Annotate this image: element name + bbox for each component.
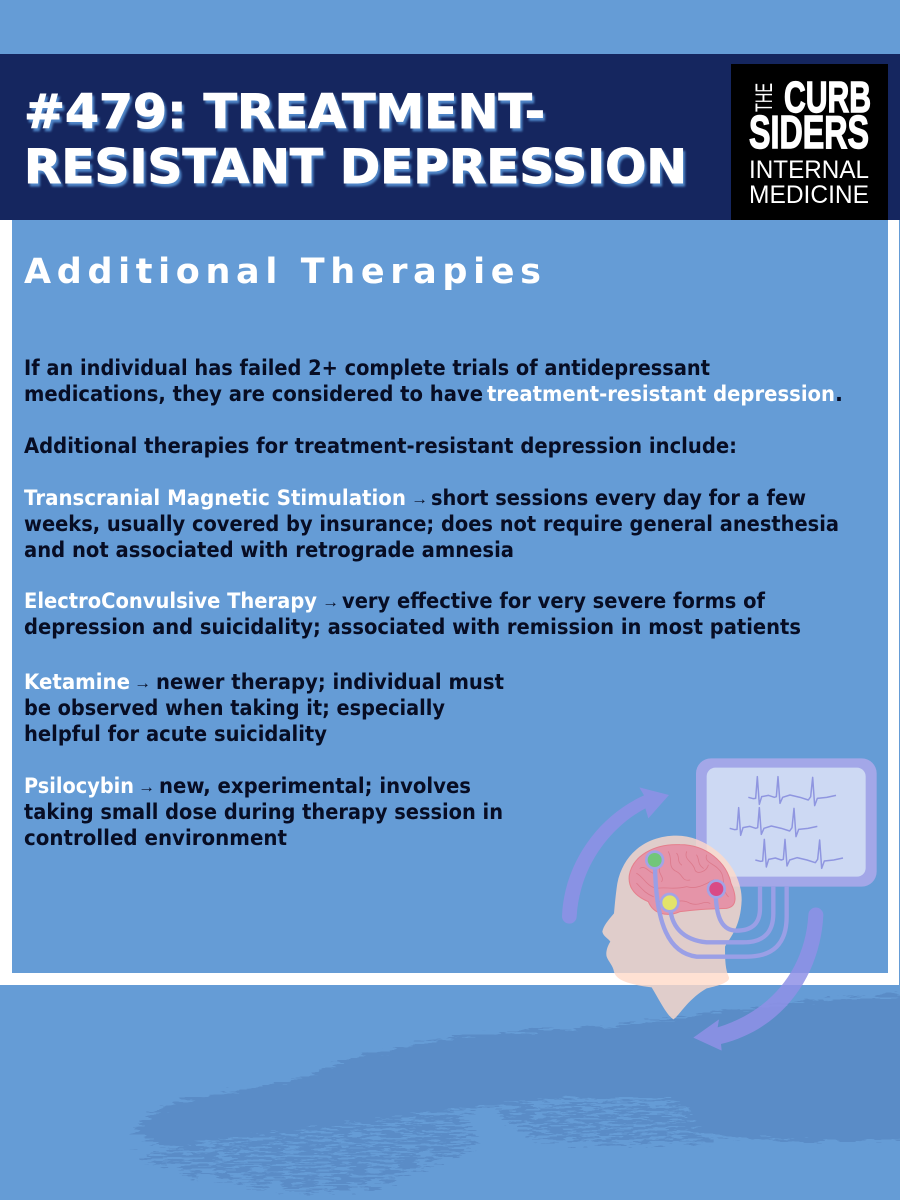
therapy: electroconvulsive therapy: ElectroConvulsive Therapy — [24, 589, 317, 613]
definition paragraph: treatment-resistant depression — [487, 382, 835, 406]
title — [24, 85, 687, 195]
therapy: transcranial magnetic stimulation: short sessions every day for a few — [431, 486, 806, 510]
logo: The Curb Siders Internal Medicine — [731, 64, 888, 220]
header band — [0, 54, 900, 220]
therapy: ketamine: helpful for acute suicidality — [24, 722, 327, 746]
definition paragraph: medications, they are considered to have — [24, 382, 483, 406]
therapy: electroconvulsive therapy — [24, 589, 801, 639]
icon: brain — [629, 845, 735, 914]
therapy: ketamine: newer therapy; individual must — [156, 670, 504, 694]
therapy: transcranial magnetic stimulation: and not associated with retrograde amnesia — [24, 538, 514, 562]
icon: monitor with ECG traces — [696, 758, 877, 887]
therapy: psilocybin: new, experimental; involves — [159, 774, 471, 798]
title: RESISTANT DEPRESSION — [24, 140, 687, 195]
therapy: transcranial magnetic stimulation: weeks, usually covered by insurance; does not require general anesthesia — [24, 512, 839, 536]
title: #479: TREATMENT- — [24, 85, 545, 140]
arrow: upper left cycle arrow — [562, 787, 669, 924]
white frame around content panel — [0, 220, 899, 985]
definition paragraph: If an individual has failed 2+ complete trials of antidepressant — [24, 356, 710, 380]
therapy: electroconvulsive therapy: → — [322, 594, 339, 611]
therapy: transcranial magnetic stimulation — [24, 486, 839, 562]
therapy: electroconvulsive therapy: very effective for very severe forms of — [342, 589, 766, 613]
icon: wires — [655, 860, 787, 957]
therapy: transcranial magnetic stimulation: Transcranial Magnetic Stimulation — [24, 486, 406, 510]
therapy: ketamine: → — [134, 675, 151, 692]
therapy: ketamine: Ketamine — [24, 670, 130, 694]
therapy: electroconvulsive therapy: depression and suicidality; associated with remission in most patients — [24, 615, 801, 639]
definition paragraph: . — [835, 382, 843, 406]
logo: The Curb Siders Internal Medicine: THE — [751, 83, 778, 112]
section heading: Additional Therapies — [24, 252, 541, 292]
arrow: lower right cycle arrow — [693, 907, 823, 1051]
logo: The Curb Siders Internal Medicine: INTERNAL — [749, 156, 869, 184]
therapy: ketamine: be observed when taking it; especially — [24, 696, 445, 720]
illustration: brain monitoring — [562, 758, 877, 1051]
icon: electrodes — [646, 852, 725, 911]
intro line: Additional therapies for treatment-resistant depression include: — [24, 434, 737, 458]
therapy: psilocybin: taking small dose during therapy session in — [24, 800, 503, 824]
icon: head silhouette — [602, 836, 742, 1019]
brush stroke texture — [100, 993, 900, 1198]
logo: The Curb Siders Internal Medicine: MEDICINE — [749, 181, 869, 209]
definition paragraph — [24, 356, 843, 406]
therapy: psilocybin: controlled environment — [24, 826, 287, 850]
therapy: psilocybin: → — [138, 779, 155, 796]
therapy: psilocybin — [24, 774, 503, 850]
therapy: ketamine — [24, 670, 504, 746]
therapy: transcranial magnetic stimulation: → — [411, 491, 428, 508]
therapy: psilocybin: Psilocybin — [24, 774, 134, 798]
